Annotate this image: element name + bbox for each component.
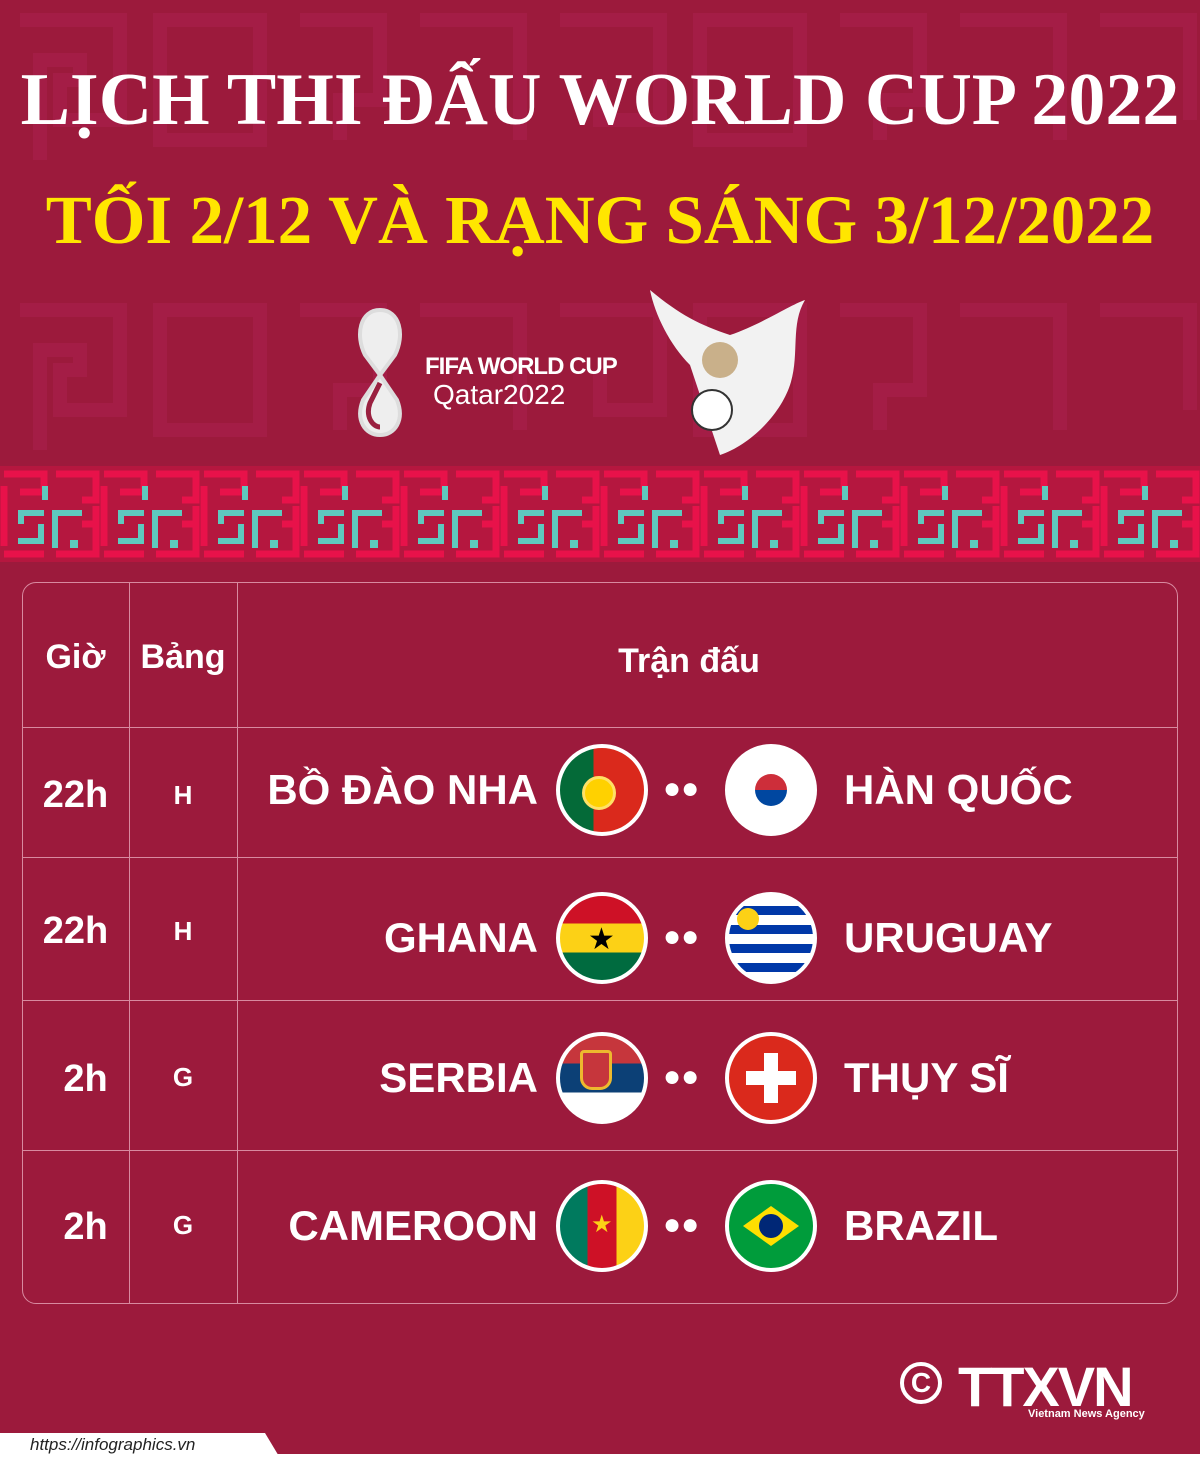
row 3: SERBIA bbox=[379, 1054, 538, 1101]
row 3: G bbox=[173, 1062, 193, 1092]
row 1: H bbox=[174, 780, 192, 810]
logo: TTXVN: C bbox=[911, 1367, 931, 1398]
row 4: CAMEROON bbox=[288, 1202, 538, 1249]
background pattern bbox=[20, 13, 1197, 450]
row 4: G bbox=[173, 1210, 193, 1240]
flag: Portugal bbox=[556, 744, 648, 836]
row 1: BỒ ĐÀO NHA bbox=[267, 766, 538, 813]
logo: TTXVN: TTXVN bbox=[958, 1355, 1132, 1418]
row 4: ●● bbox=[663, 1208, 699, 1241]
footer url tab: https://infographics.vn bbox=[30, 1435, 195, 1454]
flag: Uruguay bbox=[725, 892, 817, 984]
flag: Serbia bbox=[556, 1032, 648, 1124]
flag: Ghana bbox=[556, 892, 648, 984]
row 1 bbox=[43, 744, 1073, 836]
header: Giờ: Giờ bbox=[45, 638, 106, 676]
row 2: URUGUAY bbox=[844, 914, 1052, 961]
row 2: GHANA bbox=[384, 914, 538, 961]
row 2: 22h bbox=[43, 910, 108, 952]
logo: FIFA World Cup Qatar 2022 bbox=[358, 308, 617, 437]
flag: Brazil bbox=[725, 1180, 817, 1272]
logo: TTXVN: Vietnam News Agency bbox=[1028, 1408, 1145, 1420]
row 2: H bbox=[174, 916, 192, 946]
header: Trận đấu: Trận đấu bbox=[618, 642, 760, 680]
flag: Ghana: ★ bbox=[588, 923, 615, 956]
header: Bảng: Bảng bbox=[140, 638, 226, 676]
row 3: 2h bbox=[63, 1058, 108, 1100]
subtitle: TỐI 2/12 VÀ RẠNG SÁNG 3/12/2022 bbox=[46, 182, 1154, 258]
row 3: THỤY SĨ bbox=[844, 1054, 1009, 1101]
row 1: ●● bbox=[663, 772, 699, 805]
row 4 bbox=[63, 1180, 998, 1272]
decorative band bbox=[0, 466, 1200, 562]
row 4: 2h bbox=[63, 1206, 108, 1248]
logo: FIFA World Cup Qatar 2022: Qatar2022 bbox=[433, 379, 565, 410]
flag: Cameroon: ★ bbox=[591, 1211, 613, 1238]
row 2 bbox=[43, 892, 1052, 984]
row 2: ●● bbox=[663, 920, 699, 953]
title: LỊCH THI ĐẤU WORLD CUP 2022 bbox=[21, 59, 1179, 141]
logo: TTXVN bbox=[900, 1355, 1145, 1420]
flag: Cameroon bbox=[556, 1180, 648, 1272]
mascot bbox=[650, 290, 805, 455]
footer url tab bbox=[0, 1433, 1200, 1458]
row 1: 22h bbox=[43, 774, 108, 816]
row 1: HÀN QUỐC bbox=[844, 766, 1073, 813]
schedule table bbox=[22, 582, 1178, 1304]
logo: FIFA World Cup Qatar 2022: FIFA WORLD CUP bbox=[425, 353, 617, 380]
row 3 bbox=[63, 1032, 1012, 1124]
flag: Korea bbox=[725, 744, 817, 836]
row 3: ●● bbox=[663, 1060, 699, 1093]
flag: Switzerland bbox=[725, 1032, 817, 1124]
row 4: BRAZIL bbox=[844, 1202, 998, 1249]
